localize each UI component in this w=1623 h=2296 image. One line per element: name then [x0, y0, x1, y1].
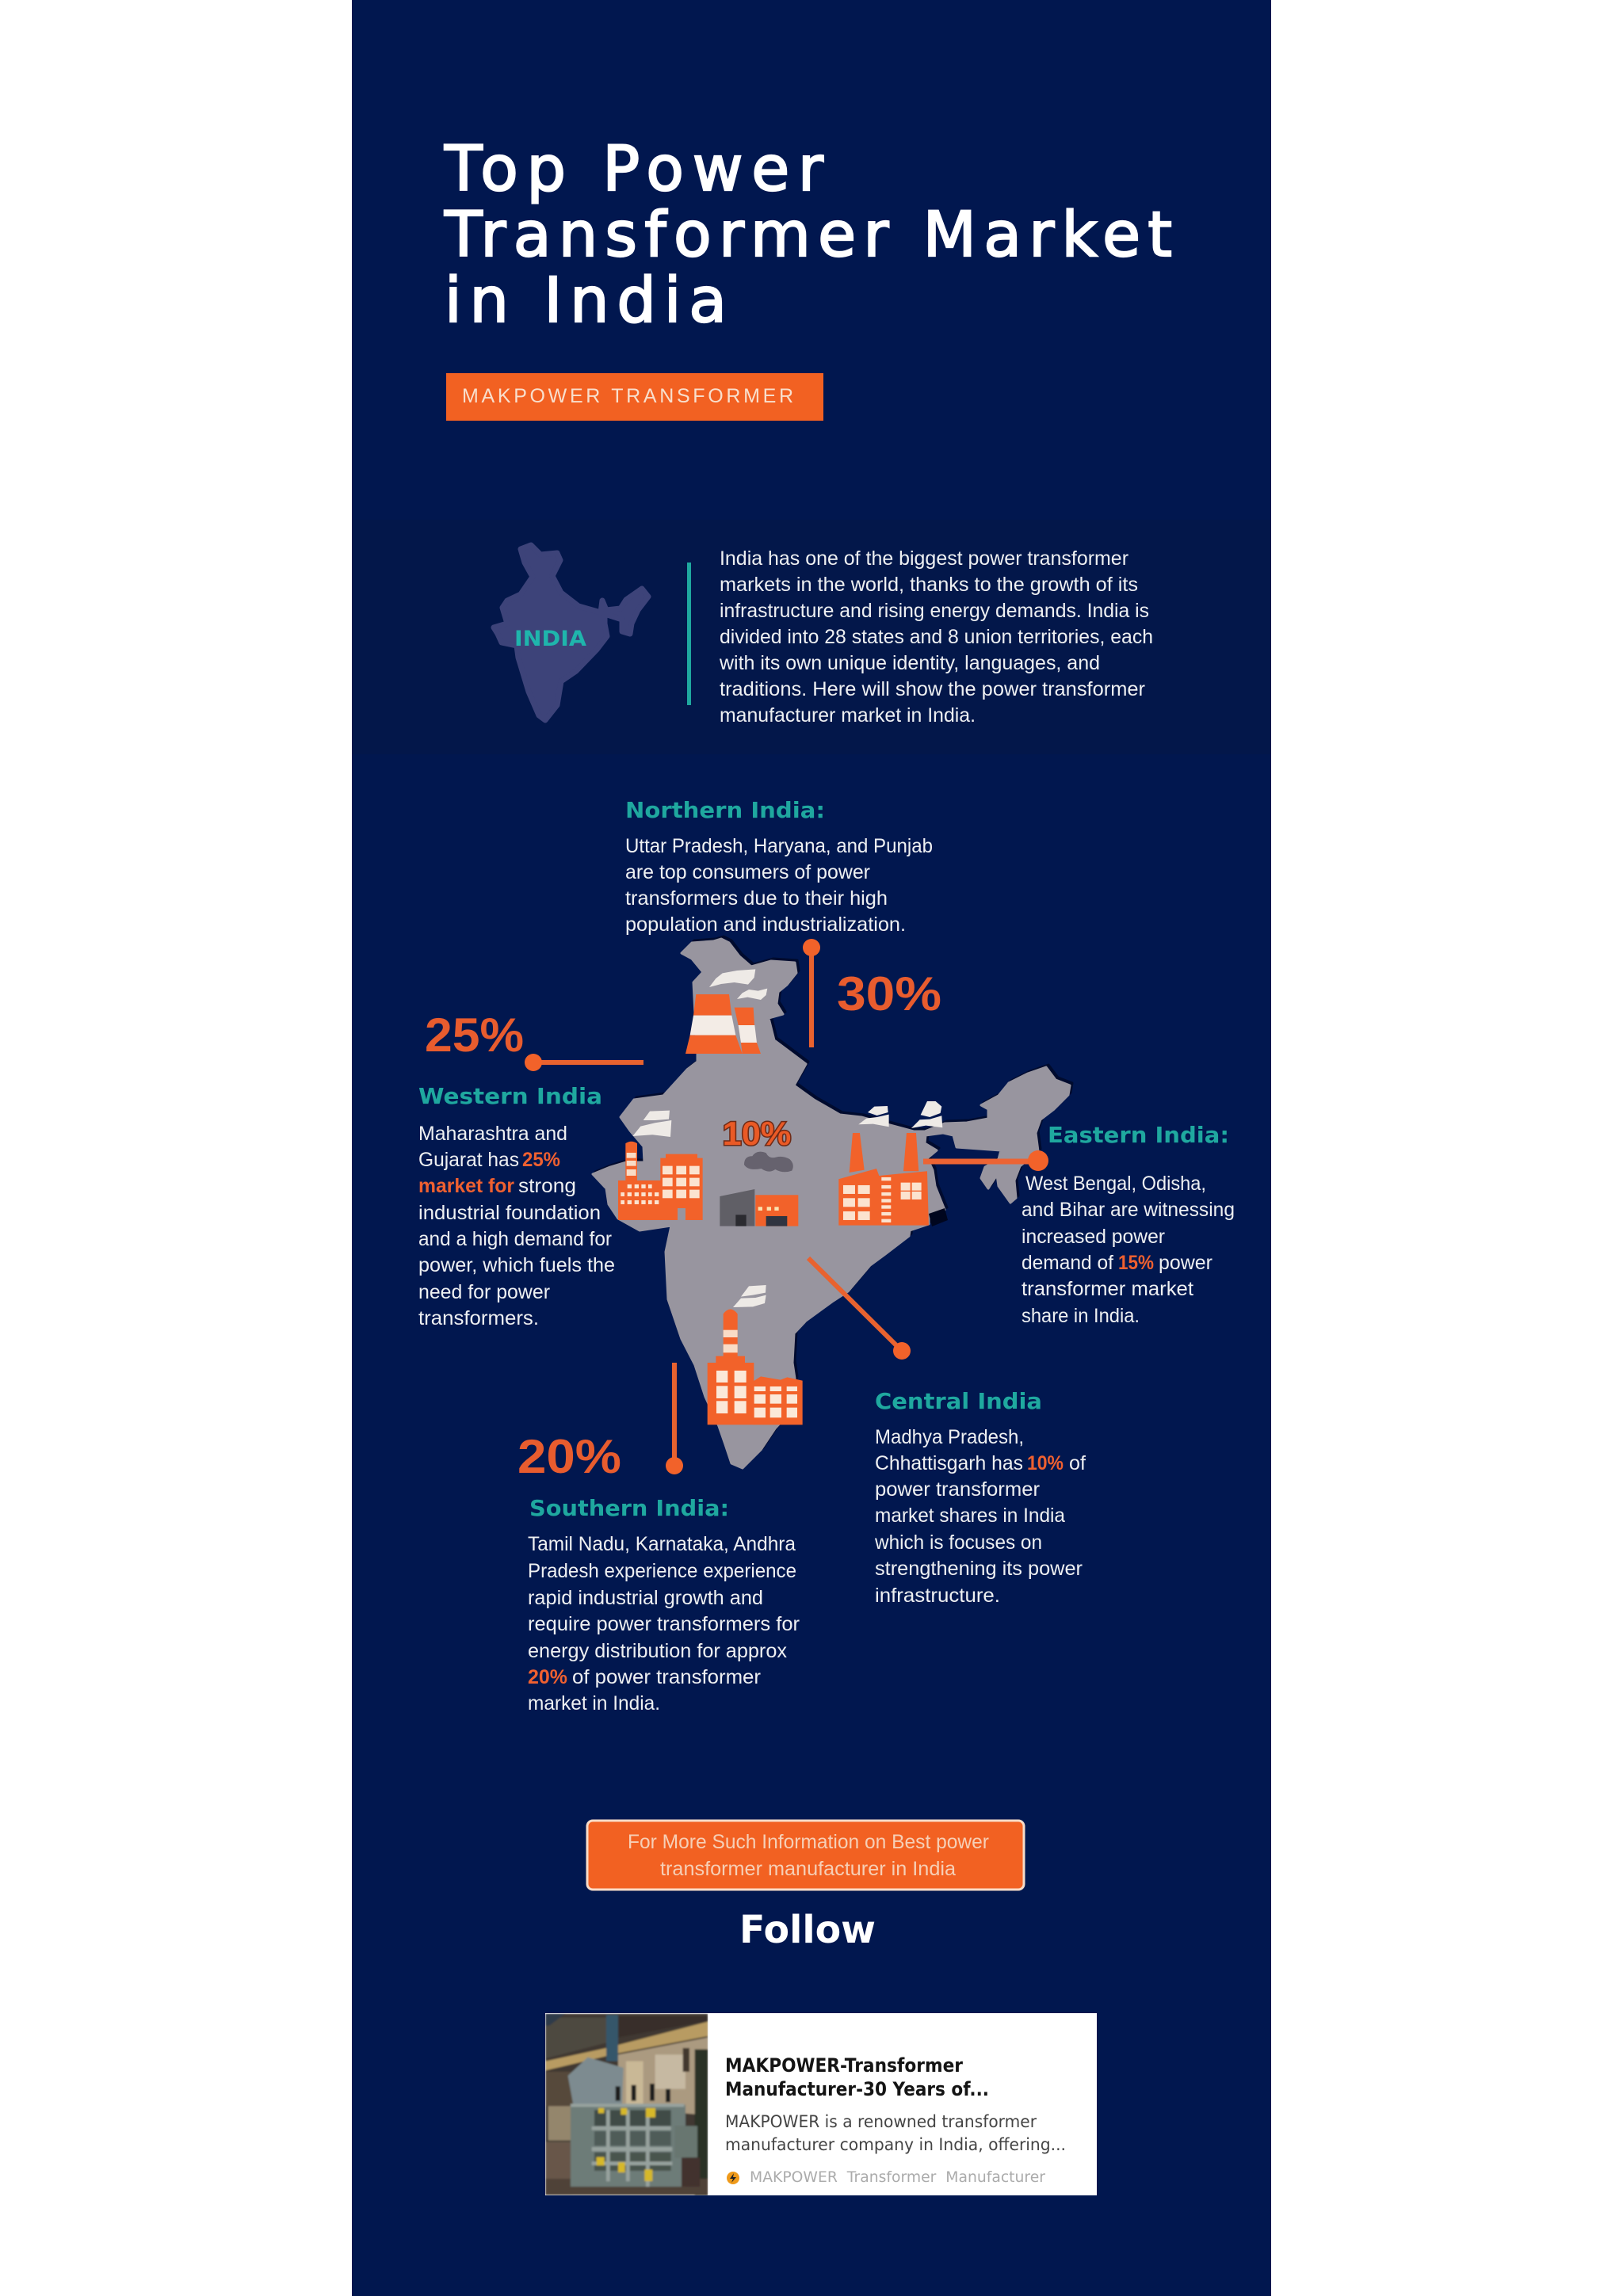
card title: Manufacturer-30 Years of... — [725, 2078, 989, 2100]
card description: MAKPOWER is a renowned transformer — [725, 2112, 1037, 2131]
Southern India block: Southern India: — [529, 1495, 729, 1521]
Central India block: strengthening its power — [875, 1558, 1083, 1580]
call-to-action button — [587, 1821, 1024, 1890]
Eastern India block: and Bihar are witnessing — [1022, 1199, 1235, 1221]
Western India block: Maharashtra and — [418, 1123, 567, 1145]
Western India block: and a high demand for — [418, 1228, 612, 1250]
Central India block: Chhattisgarh has — [875, 1452, 1023, 1474]
link preview card — [545, 2013, 1097, 2197]
Follow heading: Follow — [739, 1908, 876, 1952]
Central India block: which is focuses on — [874, 1531, 1042, 1554]
Western India block: 25% — [522, 1149, 560, 1171]
Northern India block: Northern India: — [625, 797, 825, 823]
icon: central 10% with factory: 10% — [723, 1115, 791, 1152]
card source line: MAKPOWER Transformer Manufacturer — [750, 2168, 1045, 2186]
call-to-action button: transformer manufacturer in India — [660, 1858, 956, 1880]
intro paragraph: markets in the world, thanks to the growth of its — [720, 574, 1138, 596]
Northern India block — [625, 797, 933, 936]
title: Top Power — [444, 134, 824, 205]
Southern India block: require power transformers for — [528, 1613, 800, 1635]
30% callout — [803, 939, 941, 1047]
small India map with label — [494, 545, 648, 720]
Western India block: market for — [418, 1175, 514, 1197]
intro paragraph: manufacturer market in India. — [720, 704, 976, 727]
icon: factory (south) — [708, 1285, 803, 1425]
Central India block: infrastructure. — [875, 1585, 1000, 1607]
title — [444, 134, 1172, 337]
Western India block: power, which fuels the — [418, 1254, 615, 1276]
card title — [725, 2054, 989, 2100]
Eastern India block: West Bengal, Odisha, — [1025, 1173, 1206, 1195]
Western India block: need for power — [418, 1281, 550, 1303]
call-to-action button: For More Such Information on Best power — [628, 1831, 989, 1853]
Southern India block: energy distribution for approx — [528, 1640, 787, 1662]
Western India block: Western India — [418, 1083, 602, 1109]
Northern India block: transformers due to their high — [625, 887, 888, 910]
Western India block — [418, 1083, 615, 1329]
Northern India block: population and industrialization. — [625, 913, 906, 936]
Eastern pointer — [923, 1150, 1048, 1171]
icon: site logo — [727, 2172, 739, 2184]
intro band background — [352, 520, 1271, 754]
intro paragraph: with its own unique identity, languages, and — [719, 652, 1100, 674]
Northern India block: are top consumers of power — [625, 861, 870, 883]
Central India block: market shares in India — [875, 1505, 1065, 1527]
Central India block: power transformer — [875, 1478, 1040, 1501]
card title: MAKPOWER-Transformer — [725, 2054, 963, 2077]
Central pointer — [808, 1258, 911, 1360]
icon: factory (west) — [618, 1111, 703, 1220]
Eastern India block: transformer market — [1022, 1278, 1193, 1300]
Central India block: Central India — [875, 1388, 1042, 1414]
Eastern India block: demand of — [1022, 1252, 1113, 1274]
Western India block: strong — [518, 1175, 576, 1197]
Western India block: Gujarat has — [418, 1149, 519, 1171]
Eastern India block: power — [1159, 1252, 1212, 1274]
Eastern India block: share in India. — [1022, 1305, 1140, 1327]
card description: manufacturer company in India, offering... — [725, 2135, 1066, 2154]
Southern India block: Tamil Nadu, Karnataka, Andhra — [528, 1533, 796, 1555]
Southern India block: market in India. — [528, 1692, 660, 1714]
Central India block: Madhya Pradesh, — [875, 1426, 1024, 1448]
badge: MAKPOWER TRANSFORMER — [446, 373, 823, 421]
25% callout — [425, 1009, 643, 1071]
card description — [725, 2112, 1066, 2154]
Northern India block: Uttar Pradesh, Haryana, and Punjab — [625, 835, 933, 857]
Eastern India block: 15% — [1118, 1252, 1154, 1274]
Central India block: 10% — [1027, 1452, 1064, 1474]
25% callout: 25% — [425, 1009, 524, 1062]
title: in India — [445, 265, 727, 337]
badge: MAKPOWER TRANSFORMER: MAKPOWER TRANSFORMER — [462, 385, 793, 407]
Southern India block: Pradesh experience experience — [528, 1560, 796, 1582]
icon: cooling towers (north) — [685, 969, 767, 1054]
Southern India block: of power transformer — [572, 1666, 761, 1688]
icon: factory (east) — [838, 1101, 942, 1226]
intro paragraph: divided into 28 states and 8 union territories, each — [720, 626, 1153, 648]
20% callout: 20% — [517, 1430, 621, 1483]
Western India block: industrial foundation — [418, 1202, 601, 1224]
teal divider — [687, 563, 691, 705]
Southern India block: 20% — [528, 1666, 567, 1688]
small India map with label: INDIA — [514, 627, 586, 651]
intro paragraph — [719, 547, 1153, 727]
Eastern India block: increased power — [1022, 1226, 1165, 1248]
intro paragraph: infrastructure and rising energy demands. India is — [720, 600, 1149, 622]
Eastern India block: Eastern India: — [1048, 1122, 1229, 1148]
Central India block: of — [1069, 1452, 1086, 1474]
intro paragraph: India has one of the biggest power transformer — [720, 547, 1128, 570]
Southern India block — [528, 1495, 800, 1714]
icon: central 10% with factory — [720, 1115, 798, 1226]
India map — [593, 936, 1072, 1468]
30% callout: 30% — [837, 967, 941, 1020]
Central India block — [874, 1388, 1086, 1607]
card background — [545, 2013, 1097, 2195]
navy poster background — [352, 0, 1271, 2296]
photo: transformer in factory — [545, 2014, 708, 2197]
Western India block: transformers. — [418, 1307, 539, 1329]
Southern India block: rapid industrial growth and — [528, 1587, 763, 1609]
infographic canvas — [352, 0, 1271, 2296]
intro paragraph: traditions. Here will show the power transformer — [720, 678, 1145, 700]
20% callout — [517, 1363, 683, 1483]
Eastern India block — [1022, 1122, 1235, 1327]
title: Transformer Market — [444, 200, 1172, 271]
